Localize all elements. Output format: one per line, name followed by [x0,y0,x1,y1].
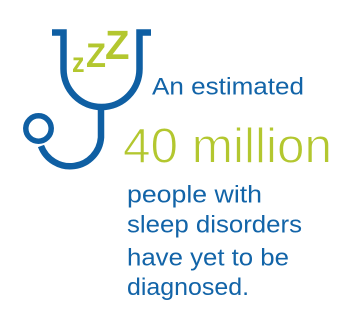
text: An estimated: An estimated [152,73,304,100]
zzz: Z [105,22,130,68]
icon: stethoscope with sleeping zzz [26,22,151,166]
text: 40 million: 40 million [123,120,332,174]
text: people with sleep disorders have yet to be diagnosed [127,182,302,301]
zzz [72,22,130,78]
text: people with sleep disorders have yet to be diagnosed: diagnosed. [127,274,249,301]
text: people with sleep disorders have yet to be diagnosed: people with [127,182,262,209]
stethoscope [26,32,151,166]
zzz: Z [86,37,106,75]
text: people with sleep disorders have yet to be diagnosed: sleep disorders [127,211,302,238]
text: people with sleep disorders have yet to be diagnosed: have yet to be [127,245,289,272]
zzz: z [72,47,84,78]
